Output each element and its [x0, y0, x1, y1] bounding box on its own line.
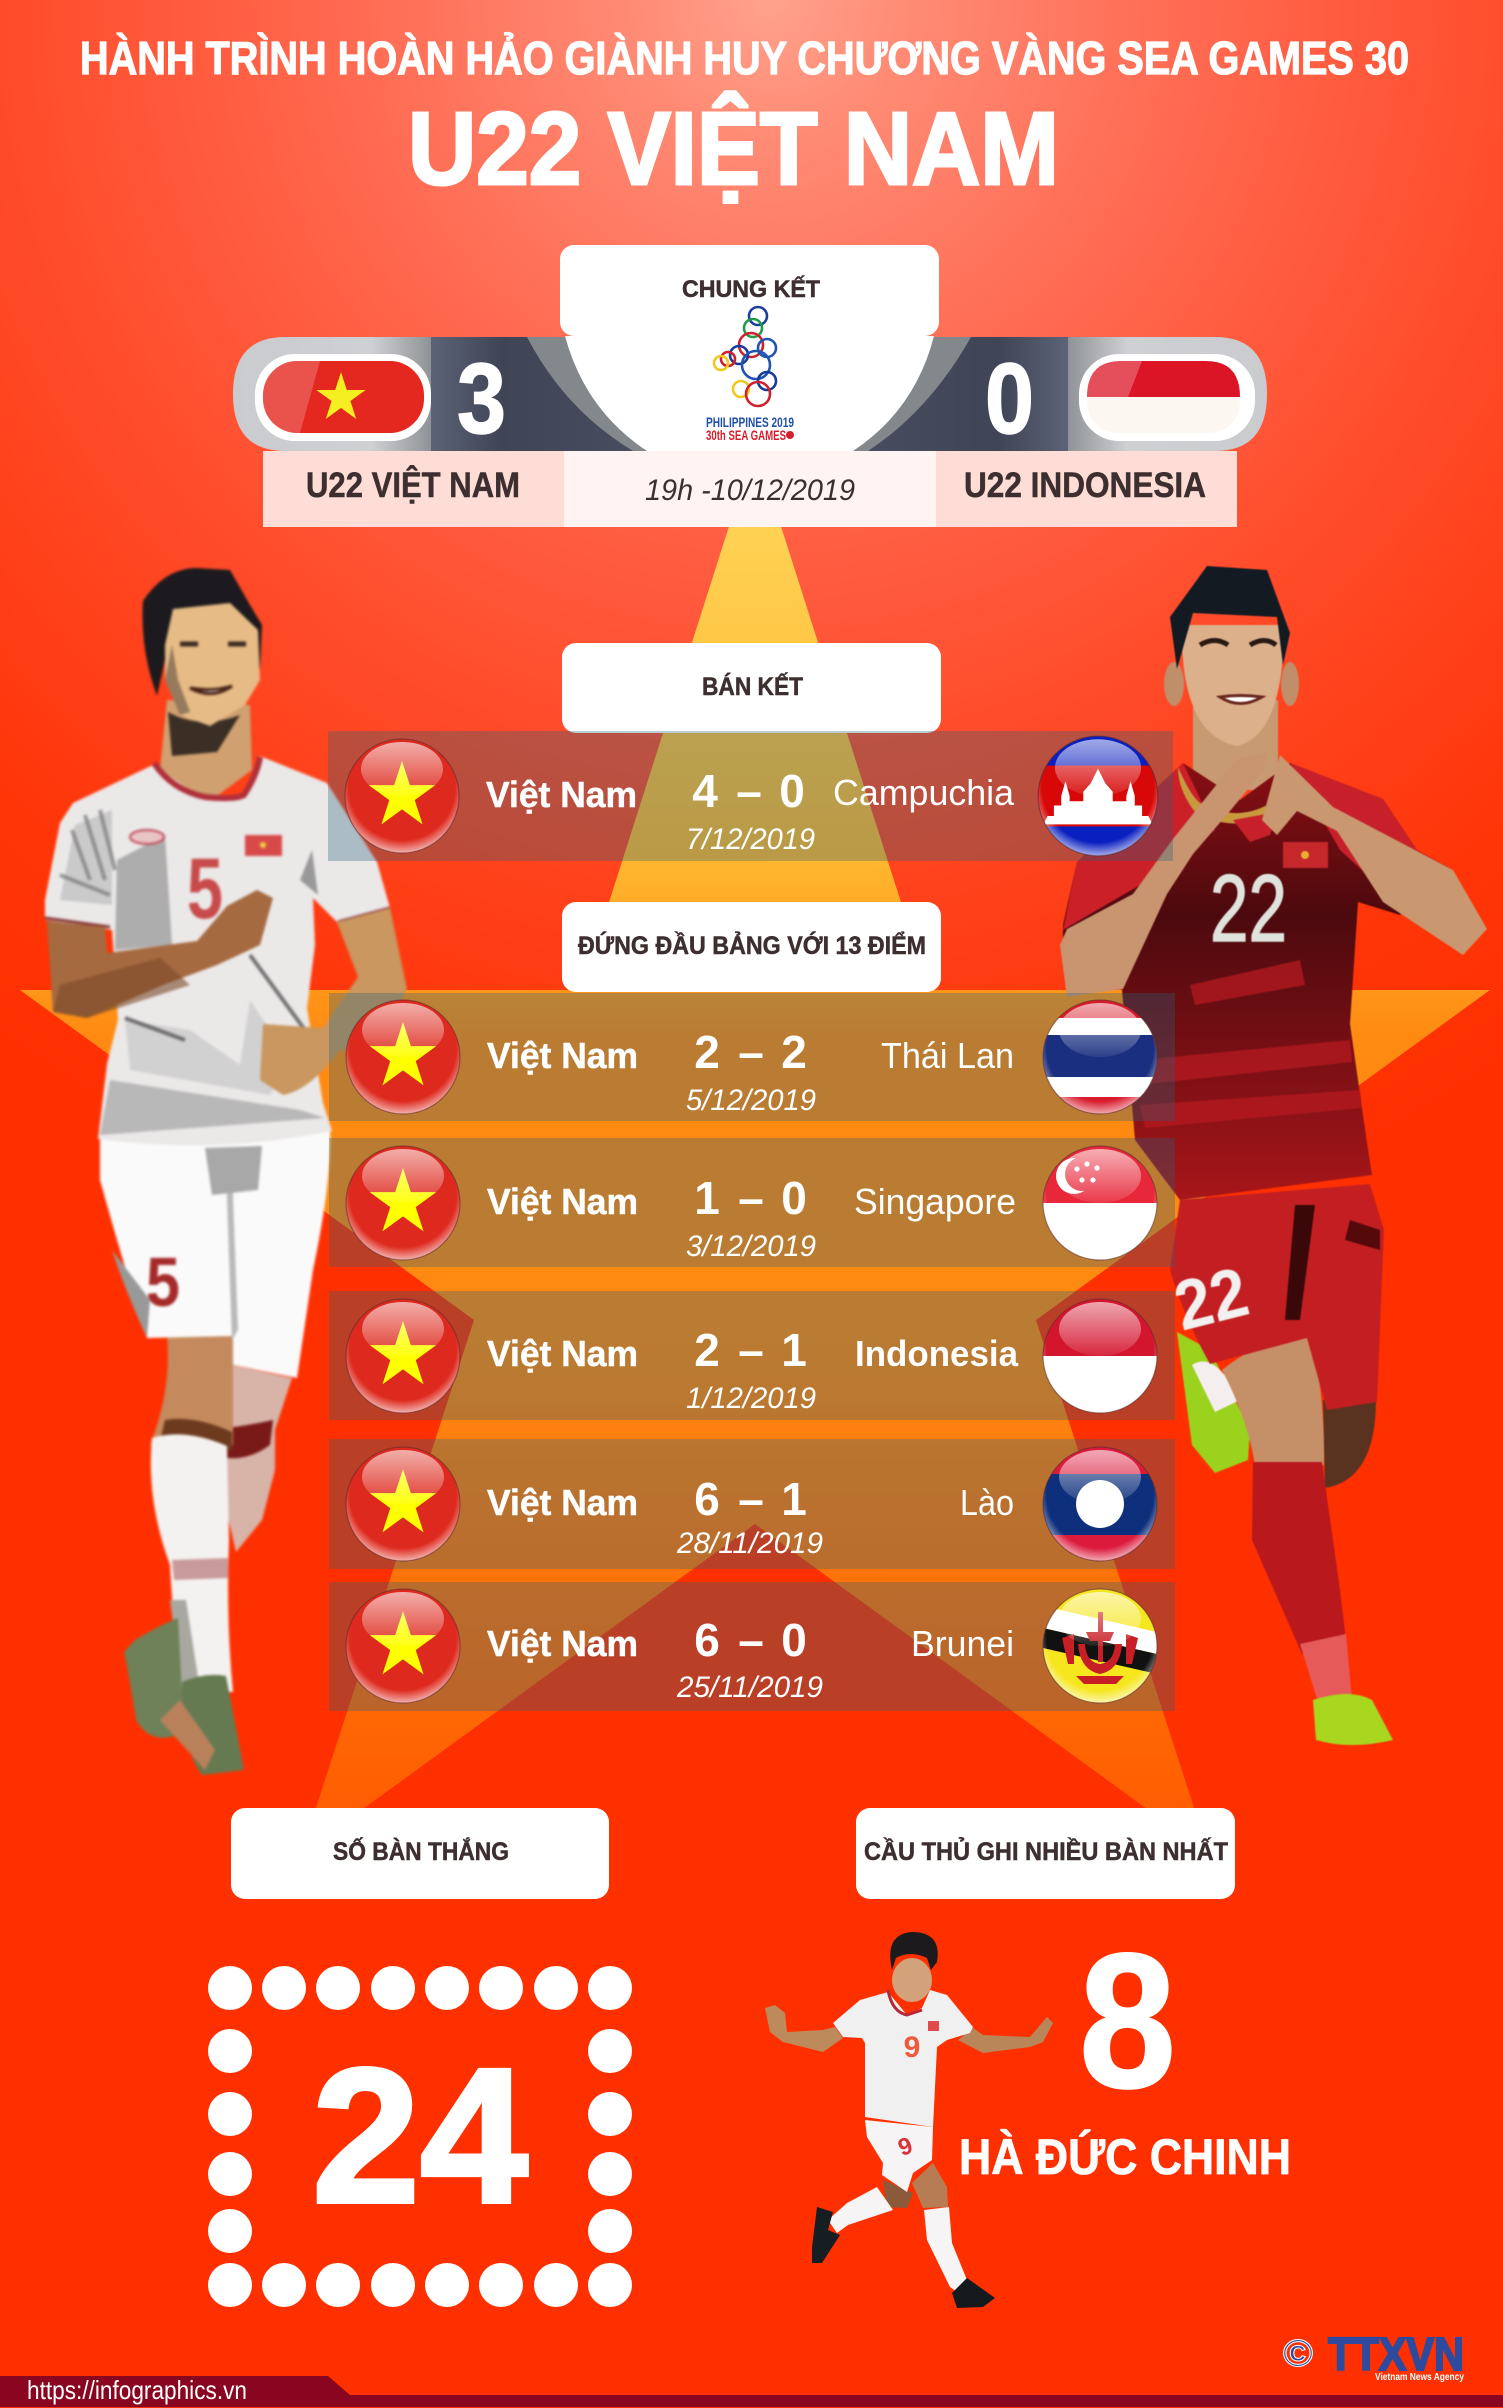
sock [151, 1434, 233, 1692]
bright sleeves [1063, 763, 1215, 930]
heading: chung ket: CHUNG KẾT [682, 275, 820, 303]
team: viet nam: Việt Nam [487, 1623, 638, 1664]
score [694, 1026, 807, 1078]
back calf [1323, 1400, 1376, 1488]
flag: vietnam [346, 1447, 460, 1561]
white bowl [565, 336, 934, 451]
flag: vietnam [345, 739, 459, 853]
big background star [20, 445, 1490, 1854]
stat: total goals: 24 [312, 2028, 528, 2243]
flag: vietnam [346, 1000, 460, 1114]
gray pill [233, 337, 1267, 451]
team name: vietnam: U22 VIỆT NAM [306, 465, 520, 505]
shirt number: 5 [187, 841, 223, 937]
team name: indonesia: U22 INDONESIA [964, 466, 1206, 505]
team: viet nam: Việt Nam [486, 774, 637, 815]
shorts [1170, 1184, 1384, 1410]
box: ban ket [562, 643, 941, 733]
crest and flag patch [130, 830, 282, 856]
head [1164, 566, 1299, 746]
shorts number: 9 [895, 2132, 916, 2162]
score [694, 1614, 807, 1666]
score: 0 [781, 1172, 807, 1224]
score: – [736, 765, 762, 817]
title [80, 32, 1409, 206]
row: vietnam vs singapore [329, 1138, 1175, 1267]
hair [1170, 566, 1290, 669]
title line 2: U22 VIỆT NAM [408, 91, 1059, 206]
team: viet nam: Việt Nam [487, 1333, 638, 1374]
panel: final scoreboard [233, 245, 1267, 527]
facial features [1200, 640, 1276, 645]
goal dots frame [208, 1966, 632, 2307]
left arm [1060, 752, 1267, 997]
score: – [738, 1614, 764, 1666]
logo: ttxvn: Vietnam News Agency [1375, 2372, 1464, 2383]
sock [1252, 1462, 1346, 1654]
shoes [124, 1618, 184, 1738]
score: 6 [694, 1614, 720, 1666]
ears [1164, 662, 1184, 706]
left arm [765, 2005, 843, 2052]
box: group stage [562, 902, 941, 992]
shorts [865, 2120, 933, 2192]
match date: 19h -10/12/2019 [645, 474, 855, 507]
neck [160, 700, 252, 805]
flag: thailand [1043, 1000, 1157, 1114]
score: 0 [781, 1614, 807, 1666]
face [1182, 625, 1284, 746]
shorts [100, 1128, 330, 1378]
right arm [958, 2017, 1053, 2053]
footer bar [0, 2376, 1503, 2407]
thigh [150, 1335, 233, 1445]
heading: group stage: ĐỨNG ĐẦU BẢNG VỚI 13 ĐIỂM [578, 930, 926, 960]
back thigh [883, 2180, 913, 2208]
gold collar [1178, 767, 1277, 824]
jersey [1063, 763, 1453, 1200]
flag: vietnam [346, 1299, 460, 1413]
front shoe [1313, 1694, 1393, 1745]
flag: vietnam [346, 1589, 460, 1703]
face [892, 1958, 932, 2002]
date: 28/11/2019 [676, 1527, 823, 1560]
box: top scorer [856, 1808, 1235, 1899]
row: vietnam vs brunei [329, 1582, 1175, 1711]
team: viet nam: Việt Nam [487, 1035, 638, 1076]
team: singapore: Singapore [854, 1181, 1016, 1222]
row: vietnam vs campuchia [328, 731, 1173, 861]
icon: sea games logo: PHILIPPINES 2019 [706, 414, 794, 430]
score [694, 1324, 807, 1376]
flag: vietnam pill [255, 354, 431, 441]
shirt number: 9 [904, 2031, 920, 2064]
score: 1 [694, 1172, 720, 1224]
score: 4 [692, 765, 718, 817]
score: 2 [694, 1324, 720, 1376]
player: ha duc chinh [765, 1932, 1053, 2308]
left arm [47, 890, 273, 1018]
row: vietnam vs indonesia [329, 1291, 1175, 1420]
score: 0 [779, 765, 805, 817]
flag: indonesia [1043, 1299, 1157, 1413]
back shoe [1177, 1332, 1250, 1473]
shirt number: 22 [1210, 856, 1287, 962]
score: 1 [781, 1324, 807, 1376]
score: 6 [694, 1473, 720, 1525]
score: 1 [781, 1473, 807, 1525]
icon: sea games logo [706, 307, 794, 443]
hair [890, 1932, 938, 1970]
box: chung ket [560, 245, 939, 336]
front shoe [952, 2278, 995, 2308]
back sock [828, 2187, 893, 2233]
flag patch [1283, 842, 1328, 868]
logo: ttxvn [1283, 2328, 1464, 2383]
date: 3/12/2019 [686, 1230, 816, 1263]
hair [143, 568, 262, 696]
jersey [45, 756, 390, 1145]
neck [1193, 700, 1278, 790]
team: thai lan: Thái Lan [881, 1035, 1014, 1076]
sleeve hems [45, 908, 390, 927]
player: right, number 22 red kit [1060, 566, 1487, 1745]
collar [888, 1990, 922, 2015]
date: 7/12/2019 [686, 823, 815, 856]
back leg [224, 1365, 292, 1552]
score: – [738, 1473, 764, 1525]
score [694, 1172, 807, 1224]
flag: cambodia [1038, 736, 1158, 856]
label bar [263, 451, 1237, 527]
score: vietnam: 3 [457, 343, 506, 455]
score: – [738, 1324, 764, 1376]
heading: ban ket: BÁN KẾT [702, 672, 803, 701]
score [694, 1473, 807, 1525]
flag: singapore [1043, 1146, 1157, 1260]
dark score plates [431, 337, 1068, 451]
face [165, 603, 260, 726]
flag: vietnam [346, 1146, 460, 1260]
team: indonesia: Indonesia [855, 1333, 1019, 1374]
logo: ttxvn: © [1283, 2333, 1313, 2375]
row: vietnam vs thai lan [329, 993, 1175, 1121]
team: brunei: Brunei [911, 1623, 1014, 1664]
jersey [833, 1990, 973, 2127]
date: 5/12/2019 [686, 1084, 816, 1117]
player: left, number 5 white kit [45, 568, 407, 1775]
logo: ttxvn: TTXVN [1328, 2328, 1464, 2380]
top scorer name: HÀ ĐỨC CHINH [959, 2129, 1291, 2185]
heading: goals scored: SỐ BÀN THẮNG [333, 1836, 509, 1866]
date: 25/11/2019 [676, 1671, 823, 1704]
front thigh [912, 2163, 948, 2208]
jersey streaks [1140, 960, 1362, 1128]
back shoe [812, 2207, 840, 2263]
stat: top scorer goals: 8 [1079, 1913, 1176, 2128]
date: 1/12/2019 [686, 1382, 816, 1415]
collar [154, 757, 260, 798]
score: 2 [694, 1026, 720, 1078]
score [692, 765, 805, 817]
score: indonesia: 0 [985, 343, 1034, 455]
thigh [1222, 1337, 1324, 1465]
shorts number: 5 [146, 1243, 180, 1321]
right arm [1262, 755, 1487, 955]
team: viet nam: Việt Nam [487, 1181, 638, 1222]
score: – [738, 1172, 764, 1224]
score: – [738, 1026, 764, 1078]
flag: indonesia pill [1079, 354, 1255, 441]
facial features [165, 645, 190, 715]
icon: sea games logo: 30th SEA GAMES [706, 427, 786, 443]
front sock [924, 2207, 967, 2292]
shorts number: 22 [1167, 1252, 1256, 1345]
team: campuchia: Campuchia [833, 772, 1015, 813]
flag patch [928, 2021, 939, 2031]
row: vietnam vs lao [329, 1439, 1175, 1569]
team: viet nam: Việt Nam [487, 1482, 638, 1523]
flag: brunei [1043, 1589, 1157, 1703]
heading: top scorer: CẦU THỦ GHI NHIỀU BÀN NHẤT [864, 1836, 1228, 1866]
score: 2 [781, 1026, 807, 1078]
flag: laos [1043, 1447, 1157, 1561]
right arm [260, 908, 407, 1095]
team: lao: Lào [960, 1482, 1014, 1523]
head [143, 568, 262, 726]
footer url: https://infographics.vn [27, 2375, 247, 2405]
box: goals scored [231, 1808, 609, 1899]
